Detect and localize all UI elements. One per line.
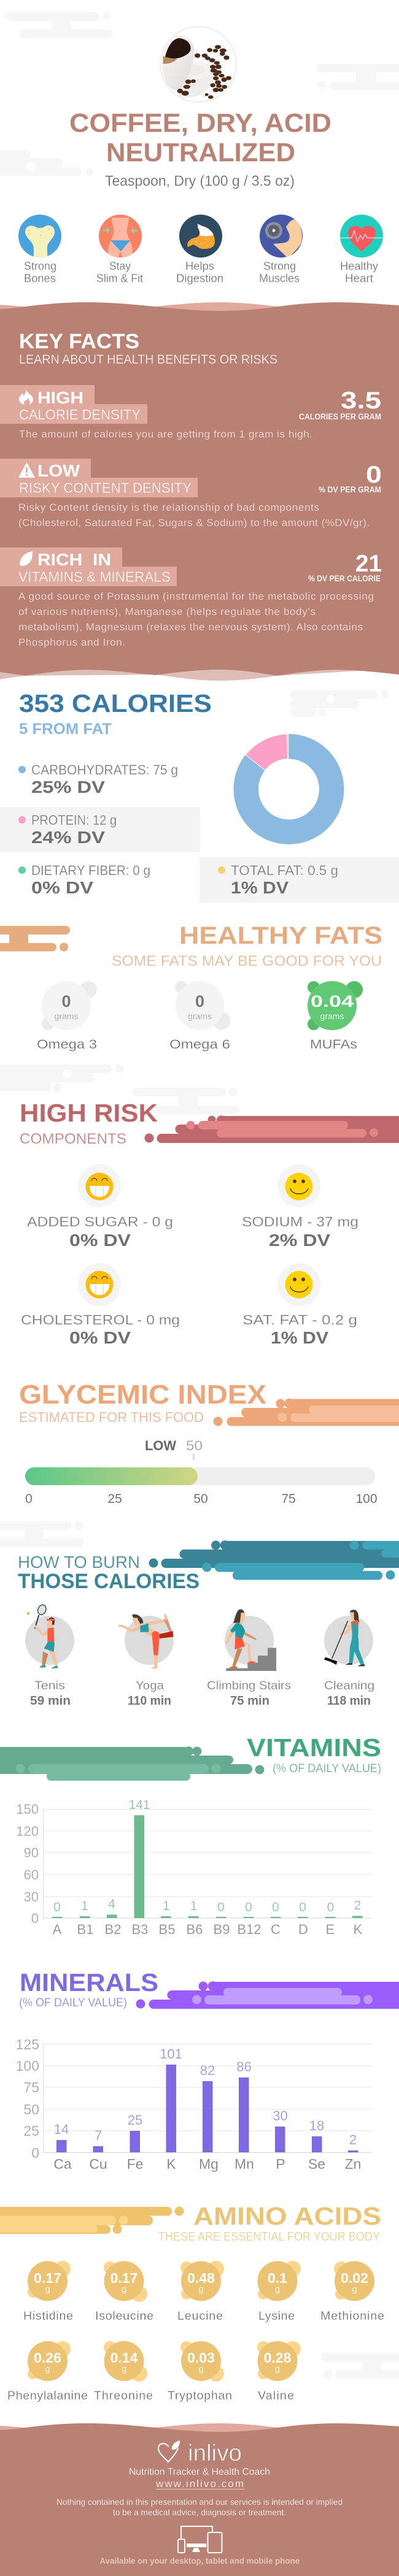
decorative cloud calories [290,690,389,717]
amino acid: methionine [320,2261,384,2323]
subheading: minerals percent daily value: (% OF DAILY VALUE) [19,1996,127,2009]
decorative cloud burn [0,1521,84,1547]
illustration: woman climbing stairs [225,1609,276,1671]
bar chart: minerals [16,2036,371,2172]
subheading: vitamins percent daily value: (% OF DAILY VALUE) [273,1762,381,1775]
minerals category labels: Se [308,2156,325,2172]
title: NEUTRALIZED [106,138,295,167]
availability note: Available on your desktop, tablet and mobile phone [99,2556,300,2566]
heading: how to burn those calories [18,1553,200,1593]
panel: key facts [0,302,399,681]
website: www.inlivo.com [155,2478,244,2490]
risk item: sodium: SODIUM - 37 mg [242,1214,358,1229]
activity: climbing stairs [207,1609,291,1708]
heading: minerals: MINERALS [20,1968,158,1997]
subtitle serving size: Teaspoon, Dry (100 g / 3.5 oz) [105,173,295,189]
amino acid: phenylalanine: 0.26 [34,2350,61,2366]
activity: yoga: Yoga [136,1680,164,1692]
vitamins value labels: 1 [81,1899,88,1913]
band: total fat background [200,857,399,903]
macro: carbohydrates: CARBOHYDRATES: 75 g [31,762,178,778]
stat: omega 6: 0 [195,992,204,1011]
vitamins category labels: A [53,1922,62,1937]
label: strong muscles: Muscles [259,272,300,285]
icon: helps digestion [179,215,222,258]
minerals axis labels: 50 [23,2101,39,2117]
minerals axis labels: 25 [23,2123,39,2139]
macro: dietary fiber: DIETARY FIBER: 0 g [31,863,150,878]
decorative cloud high risk left [0,1064,124,1091]
label: healthy heart: Heart [345,272,373,285]
activity: cleaning: Cleaning [324,1680,374,1692]
gauge value label [145,1438,203,1453]
text: risky content note [18,502,370,529]
gauge scale: 25 [107,1492,122,1506]
icon: leaf [20,551,33,566]
gauge: glycemic index [25,1438,378,1506]
activity: yoga: 110 min [128,1694,171,1708]
stat: omega 3: 0 [61,992,71,1011]
stat: calories per gram: 3.5 [341,388,381,414]
decorative cloud right [316,64,399,90]
gauge value label: LOW [145,1438,176,1453]
heading: calories: 353 CALORIES [19,689,212,717]
label: helps digestion [176,260,223,285]
stat: omega 3 [37,981,97,1052]
section decoration: burn calories [149,1540,399,1580]
minerals axis labels: 125 [16,2036,39,2052]
activity: climbing stairs: Climbing Stairs [207,1680,291,1692]
macro: dietary fiber: 0% DV [31,878,93,897]
minerals category labels: Cu [89,2156,107,2172]
logo: inlivo [158,2440,242,2466]
callout: high calorie density [0,385,147,424]
stat: calories per gram [299,388,381,421]
macro: protein: 24% DV [31,828,105,847]
stat: dv per gram [319,462,382,494]
stat: dv per gram: % DV PER GRAM [319,485,381,494]
minerals value labels: 18 [309,2118,324,2133]
text: risky content note: (Cholesterol, Saturated Fat, Sugars & Sodium) to the amount (%DV/gr). [18,517,370,529]
bar chart: vitamins [16,1798,371,1937]
risk item: cholesterol [21,1263,180,1347]
risk item: saturated fat [242,1263,357,1347]
vitamins category labels: D [298,1922,308,1937]
activity: tennis: 59 min [30,1694,71,1708]
vitamins category labels: B3 [132,1922,148,1937]
minerals category labels: Ca [53,2156,72,2172]
label: strong muscles: Strong [263,260,296,272]
section decoration: minerals [136,1981,399,2009]
minerals category labels: Zn [345,2156,361,2172]
text: calorie density note: The amount of calories you are getting from 1 gram is high. [19,428,312,440]
stat: dv per gram: 0 [366,462,382,488]
illustration: tennis player [27,1603,58,1668]
amino acid: phenylalanine: g [45,2364,50,2374]
minerals value labels [54,2046,357,2147]
label: strong bones: Strong [24,260,56,272]
title: COFFEE, DRY, ACID [69,109,331,138]
minerals value labels: 25 [128,2112,142,2128]
amino acid: threonine: g [122,2364,126,2374]
amino acid: lysine: Lysine [258,2309,295,2323]
amino acid: isoleucine [95,2261,153,2323]
vitamins axis labels: 120 [16,1824,39,1839]
icon: grinning face [86,1271,113,1299]
logo: inlivo: inlivo [188,2440,242,2466]
minerals axis labels [16,2036,39,2161]
disclaimer: Nothing contained in this presentation and our services is intended or implied [56,2497,343,2507]
heading: glycemic index: GLYCEMIC INDEX [19,1380,266,1410]
stat: omega 3: Omega 3 [37,1038,97,1052]
risk item: added sugar [27,1164,173,1250]
label: healthy heart: Healthy [340,260,378,272]
vitamins value labels: 1 [163,1899,170,1913]
icon: flame [19,389,33,405]
decorative cloud left [0,150,93,176]
amino acid: histidine: 0.17 [34,2270,61,2286]
macro: total fat: 1% DV [231,878,289,897]
stat: calories per gram: CALORIES PER GRAM [299,412,381,421]
vitamins category labels: B2 [105,1922,121,1937]
text: vitamins and minerals note: metabolism), Magnesium (relaxes the nervous system). Also contains [18,621,363,633]
minerals value labels: 14 [54,2122,69,2137]
section decoration: vitamins [0,1746,264,1781]
amino acid: leucine: 0.48 [187,2270,215,2286]
amino acid: isoleucine: Isoleucine [95,2309,153,2323]
minerals value labels: 2 [349,2132,357,2147]
vitamins axis labels [16,1802,39,1926]
amino acid: tryptophan: Tryptophan [168,2389,232,2402]
callout: low risky content density: LOW [37,461,80,480]
heading: how to burn those calories: THOSE CALORIES [18,1570,200,1593]
activity: cleaning [324,1610,374,1708]
label: strong bones: Bones [24,272,56,285]
gauge scale: 75 [281,1492,296,1506]
amino acid: valine: g [275,2364,280,2374]
icon: warning triangle [18,462,35,478]
amino acid: isoleucine: 0.17 [110,2270,138,2286]
risk item: cholesterol: 0% DV [69,1328,131,1347]
amino acid: tryptophan: 0.03 [187,2350,215,2366]
icon: grinning face [86,1172,113,1201]
heading: key facts: KEY FACTS [19,330,139,353]
vitamins value labels: 141 [128,1798,150,1812]
vitamins category labels: B5 [159,1922,175,1937]
section decoration: glycemic index [214,1399,399,1426]
amino acid: valine: Valine [258,2389,294,2402]
vitamins value labels: 0 [299,1900,306,1914]
text: vitamins and minerals note [18,590,374,648]
amino acid: histidine [23,2261,73,2323]
stat: mufas [308,981,363,1052]
heading: amino acids: AMINO ACIDS [193,2202,381,2230]
amino acid: threonine: 0.14 [110,2350,138,2366]
amino acid: histidine: Histidine [23,2309,73,2323]
amino acid: leucine [177,2261,224,2323]
stat: dv per calorie [308,551,382,583]
icon: stay slim and fit [99,215,142,261]
stat: dv per calorie: % DV PER CALORIE [308,574,381,583]
vitamins value labels: 0 [272,1900,279,1914]
minerals category labels: P [276,2156,285,2172]
vitamins category labels: K [354,1922,363,1937]
vitamins axis labels: 150 [16,1802,39,1817]
minerals category labels [53,2156,361,2172]
vitamins category labels: B12 [237,1922,261,1937]
subheading: components: COMPONENTS [20,1131,126,1147]
title [69,109,331,167]
section decoration: healthy fats [0,926,70,952]
minerals category labels: K [166,2156,176,2172]
amino acid: leucine: Leucine [177,2309,223,2323]
risk item: added sugar: ADDED SUGAR - 0 g [27,1214,173,1229]
label: helps digestion: Helps [185,260,214,272]
subheading: glycemic index: ESTIMATED FOR THIS FOOD [19,1409,204,1425]
macro: carbohydrates [18,762,178,797]
macro: carbohydrates: 25% DV [31,778,105,797]
minerals category labels: Mn [234,2156,254,2172]
vitamins axis labels: 30 [24,1889,39,1905]
heading: how to burn those calories: HOW TO BURN [18,1553,140,1572]
vitamins value labels: 0 [245,1900,252,1914]
amino acid: lysine: g [275,2284,280,2295]
minerals value labels: 7 [95,2128,102,2143]
label: stay slim and fit: Slim & Fit [96,272,143,285]
callout: rich in vitamins and minerals: RICH IN [37,550,111,569]
risk item: sodium: 2% DV [269,1231,330,1250]
text: vitamins and minerals note: Phosphorus and Iron. [18,636,125,648]
amino acid: tryptophan [168,2341,232,2402]
macro: total fat: TOTAL FAT: 0.5 g [231,863,338,878]
text: vitamins and minerals note: of various nutrients), Manganese (helps regulate the body’s [18,606,316,617]
section decoration: amino acids [0,2206,184,2234]
illustration: yoga pose [118,1614,173,1668]
activity: cleaning: 118 min [327,1694,371,1708]
vitamins value labels: 2 [354,1898,361,1913]
amino acid: histidine: g [45,2284,50,2295]
vitamins value labels: 1 [190,1899,197,1913]
heading: vitamins: VITAMINS [247,1733,381,1762]
risk item: sodium [242,1164,358,1250]
subheading: key facts: LEARN ABOUT HEALTH BENEFITS OR RISKS [19,353,277,367]
callout: rich in vitamins and minerals: VITAMINS & MINERALS [18,569,171,585]
callout: rich in vitamins and minerals [0,548,177,586]
gauge scale: 0 [25,1492,33,1506]
risk item: cholesterol: CHOLESTEROL - 0 mg [21,1312,180,1328]
illustration: woman sweeping [324,1610,365,1666]
minerals category labels: Fe [127,2156,143,2172]
label: stay slim and fit: Stay [109,260,131,272]
vitamins bars [52,1815,362,1918]
vitamins category labels [53,1922,363,1937]
amino acid: threonine [94,2341,153,2402]
amino acid: valine: 0.28 [264,2350,292,2366]
text: vitamins and minerals note: A good source of Potassium (instrumental for the metabolic processing [18,590,374,602]
icon: strong bones [18,215,61,261]
band: protein background [0,807,200,852]
minerals axis labels: 0 [31,2145,39,2161]
minerals category labels: Mg [199,2156,219,2172]
subheading: calories from fat: 5 FROM FAT [19,720,112,738]
callout: high calorie density: CALORIE DENSITY [19,407,141,422]
vitamins category labels: B9 [214,1922,230,1937]
amino acid: methionine: 0.02 [341,2270,368,2286]
tagline: Nutrition Tracker & Health Coach [129,2467,270,2477]
section decoration: high risk [145,1115,399,1143]
activity: climbing stairs: 75 min [230,1694,269,1708]
label: helps digestion: Digestion [176,272,223,285]
minerals value labels: 30 [273,2108,288,2123]
vitamins category labels: E [326,1922,335,1937]
callout: low risky content density [0,459,198,497]
label: strong muscles [259,260,300,285]
vitamins value labels: 0 [53,1900,61,1914]
label: strong bones [24,260,56,285]
risk item: saturated fat: SAT. FAT - 0.2 g [242,1312,357,1328]
macro: total fat [218,863,338,897]
amino acid: tryptophan: g [198,2364,204,2374]
vitamins axis labels: 90 [24,1845,39,1860]
decorative cloud amino acids [322,2353,399,2379]
callout: high calorie density: HIGH [37,388,83,407]
decorative cloud high risk center [133,1088,239,1114]
label: stay slim and fit [96,260,143,285]
food photo: coffee cup and beans [161,27,236,102]
activity: yoga [118,1614,174,1708]
gauge scale [25,1492,378,1506]
amino acid: phenylalanine [7,2341,88,2402]
vitamins value labels: 4 [108,1897,115,1911]
amino acid: isoleucine: g [122,2284,126,2295]
icon: devices [178,2526,222,2553]
vitamins value labels: 0 [217,1900,225,1914]
activity: tennis: Tenis [34,1680,65,1692]
amino acid: leucine: g [198,2284,204,2295]
footer panel [0,2423,399,2576]
stat: mufas: MUFAs [310,1038,357,1052]
stat: omega 3: grams [55,1011,78,1021]
amino acid: threonine: Threonine [94,2389,153,2402]
icon: smiling face [285,1271,313,1299]
minerals value labels: 86 [236,2059,252,2074]
disclaimer [56,2497,343,2517]
stat: mufas: grams [320,1011,344,1021]
gauge scale: 50 [193,1492,208,1506]
stat: omega 6: Omega 6 [169,1038,230,1052]
icon: healthy heart [340,215,383,258]
minerals bars [56,2065,358,2152]
gauge value label: 50 [186,1438,203,1453]
vitamins axis labels: 60 [24,1867,39,1882]
callout: low risky content density: RISKY CONTENT DENSITY [19,480,192,495]
label: healthy heart [340,260,378,285]
vitamins category labels: B1 [77,1922,93,1937]
vitamins category labels: B6 [187,1922,203,1937]
amino acid: methionine: Methionine [320,2309,384,2323]
risk item: added sugar: 0% DV [69,1231,131,1250]
stat: dv per calorie: 21 [355,551,382,577]
macro: protein [18,812,117,847]
minerals value labels: 101 [160,2046,182,2062]
donut chart [246,734,331,832]
stat: omega 6: grams [188,1011,212,1021]
macro: protein: PROTEIN: 12 g [31,812,117,828]
amino acid: methionine: g [352,2284,357,2295]
amino acid: phenylalanine: Phenylalanine [7,2389,88,2402]
text: risky content note: Risky Content density is the relationship of bad components [18,502,319,513]
vitamins value labels [53,1798,361,1914]
amino acid: lysine [258,2261,301,2323]
amino acid: lysine: 0.1 [268,2270,287,2286]
amino acid: valine [257,2341,301,2402]
vitamins category labels: C [271,1922,281,1937]
activity: tennis [25,1603,74,1708]
subheading: healthy fats: SOME FATS MAY BE GOOD FOR YOU [112,953,382,969]
minerals value labels: 82 [200,2063,215,2078]
gauge scale: 100 [355,1492,378,1506]
stat: mufas: 0.04 [311,992,354,1011]
minerals axis labels: 100 [16,2058,39,2074]
minerals axis labels: 75 [23,2079,39,2095]
risk item: saturated fat: 1% DV [271,1328,328,1347]
disclaimer: to be a medical advice, diagnosis or treatment. [113,2507,286,2517]
heading: high risk: HIGH RISK [20,1099,158,1127]
decorative cloud top left [6,12,113,38]
vitamins value labels: 0 [327,1900,334,1914]
icon: smiling face [285,1172,313,1201]
stat: omega 6 [169,981,231,1052]
icon: strong muscles [260,215,303,258]
heading: healthy fats: HEALTHY FATS [179,922,382,949]
vitamins axis labels: 0 [31,1911,39,1926]
macro: dietary fiber [18,863,150,897]
